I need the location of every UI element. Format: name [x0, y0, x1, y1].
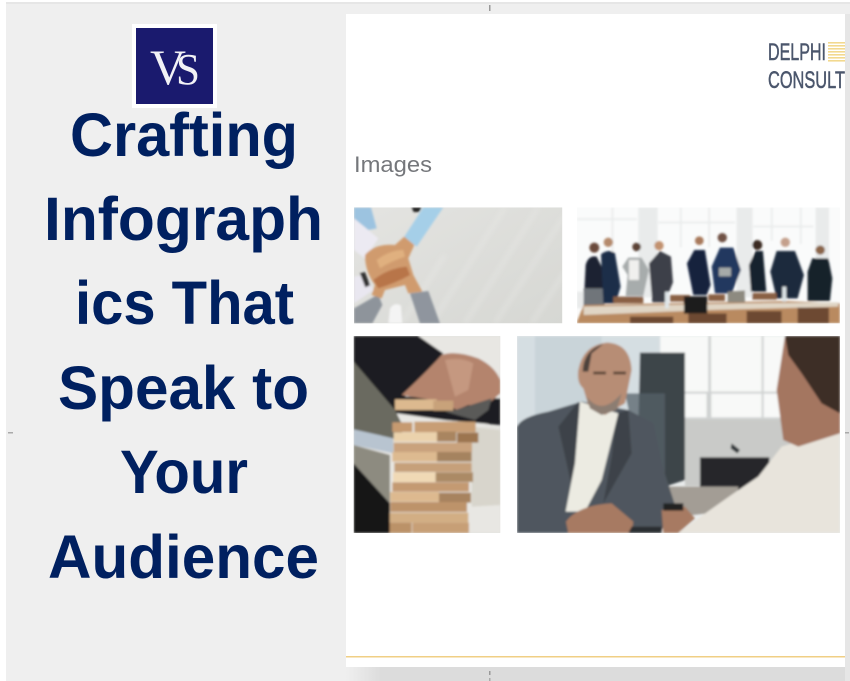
title: Speak to: [58, 354, 309, 422]
title: Your: [120, 438, 248, 506]
people: [584, 233, 832, 305]
title: ics That: [75, 269, 294, 337]
photo: business team in a boardroom: [577, 207, 840, 323]
icon: VS logo: S: [176, 45, 200, 94]
photo: stacked hands on a light floor: [354, 207, 565, 323]
Delphi Consult logo: [768, 39, 845, 94]
wooden block tower: [390, 399, 478, 533]
photo: hand stacking wooden blocks: [354, 336, 500, 533]
title: [44, 101, 323, 591]
title: Infograph: [44, 185, 323, 253]
title: Crafting: [70, 101, 298, 169]
title: Audience: [48, 523, 319, 591]
heading: Images: Images: [354, 152, 432, 177]
boardroom table: [577, 287, 840, 323]
icon: VS logo: V: [150, 39, 186, 95]
panel: white document page: [346, 14, 845, 667]
panel: left title column: [44, 24, 323, 591]
footer rule: [346, 656, 845, 658]
photo: businessman talking across a table: [517, 336, 840, 533]
icon: VS logo: [132, 24, 217, 108]
